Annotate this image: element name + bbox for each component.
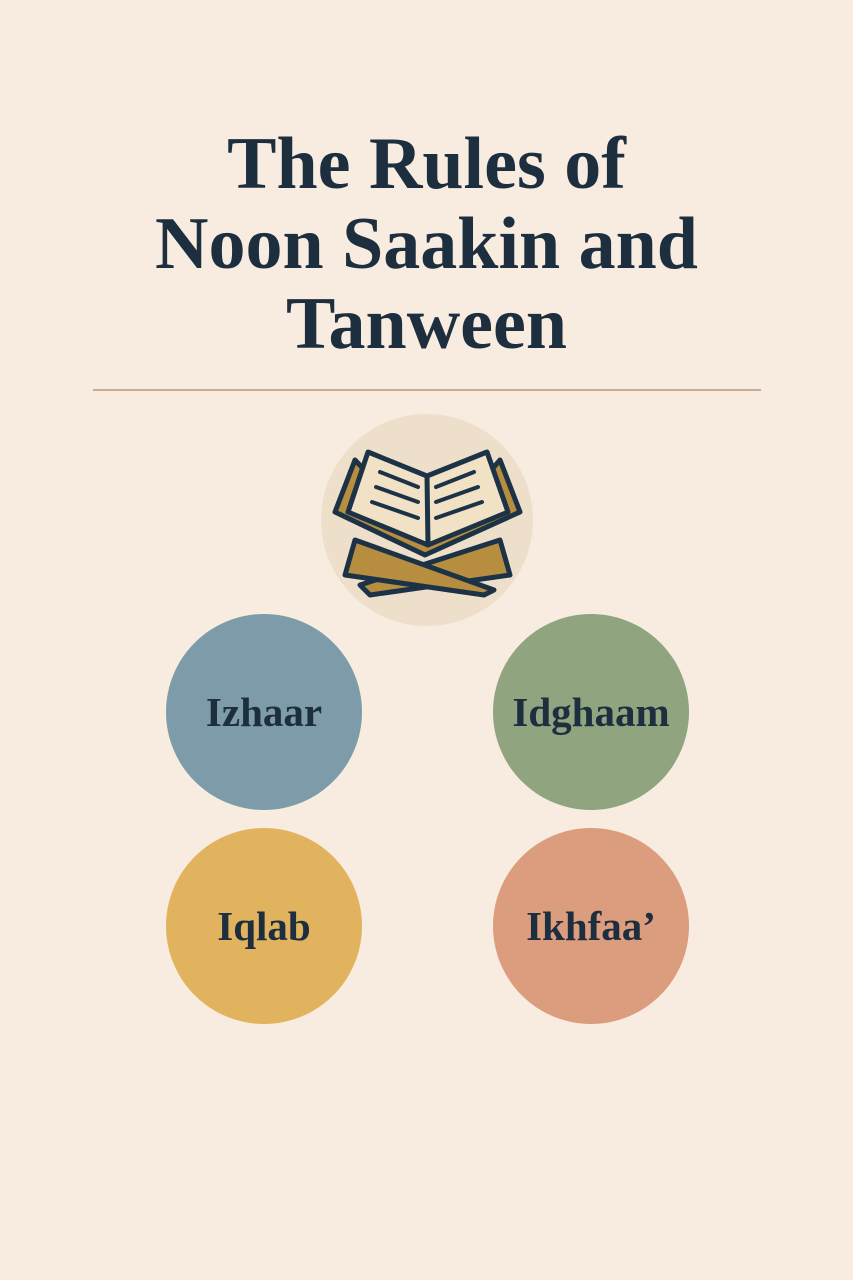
title: Noon Saakin and: [155, 203, 698, 285]
circle: Ikhfaa': [493, 828, 689, 1024]
circle: Izhaar: [166, 614, 362, 810]
icon: Quran on stand: [321, 414, 533, 626]
circle: Izhaar: Izhaar: [206, 689, 322, 735]
circle: Iqlab: [166, 828, 362, 1024]
title: [155, 123, 698, 365]
title: Tanween: [286, 283, 567, 365]
title: The Rules of: [227, 123, 626, 205]
circle: Iqlab: Iqlab: [217, 903, 311, 949]
circle: Idghaam: Idghaam: [512, 689, 670, 735]
circle: Ikhfaa': Ikhfaa’: [526, 903, 656, 949]
circle: Idghaam: [493, 614, 689, 810]
